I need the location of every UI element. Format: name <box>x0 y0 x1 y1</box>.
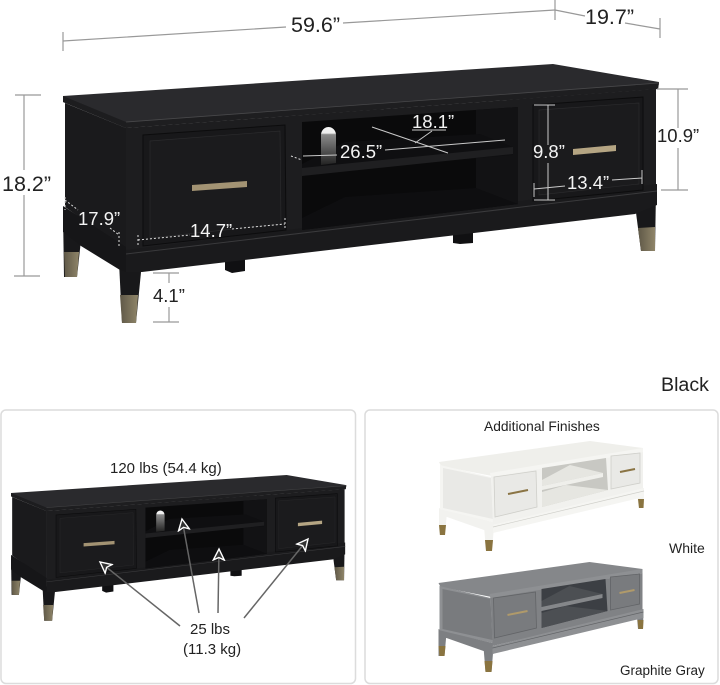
dimension: overall depth 19.7 <box>555 0 660 38</box>
dimension: shelf depth 18.1: 18.1” <box>412 111 454 132</box>
finish label: White: White <box>669 540 705 556</box>
dimension: overall height 18.2: 18.2” <box>2 172 51 196</box>
finish label: Black: Black <box>661 374 709 396</box>
dimension: drawer width 13.4 <box>534 170 642 197</box>
shelf and drawer weight capacity: (11.3 kg) <box>183 641 241 658</box>
graphite gray TV stand <box>438 562 644 672</box>
panel: weight capacity <box>1 410 356 684</box>
dimension: drawer height 9.8 <box>533 105 565 200</box>
dimension: drawer width 14.7 <box>138 218 285 247</box>
main black TV stand <box>63 64 659 323</box>
dimension: shelf width 26.5: 26.5” <box>340 141 382 162</box>
dimension: side depth 17.9 <box>65 197 120 248</box>
dimension: drawer height 9.8: 9.8” <box>533 141 565 162</box>
finish label: Graphite Gray: Graphite Gray <box>620 663 705 678</box>
dimension: overall width 59.6 <box>63 10 555 51</box>
dimension: leg height 4.1 <box>153 273 185 322</box>
dimension: shelf width 26.5 <box>291 140 505 162</box>
dimension: leg height 4.1: 4.1” <box>153 285 185 306</box>
dimension: overall depth 19.7: 19.7” <box>585 5 634 29</box>
dimension: side depth 17.9: 17.9” <box>78 208 120 229</box>
arrows to drawers and shelves <box>100 519 308 626</box>
dimension: drawer opening height 10.9 <box>657 89 699 190</box>
shelf and drawer weight capacity: 25 lbs <box>190 621 230 638</box>
heading: total weight: 120 lbs (54.4 kg) <box>110 460 222 477</box>
dimension: shelf depth 18.1 <box>372 111 454 153</box>
black TV stand with weight arrows <box>11 475 346 621</box>
white TV stand <box>439 441 644 551</box>
panel: additional finishes <box>365 410 718 684</box>
dimension: overall width 59.6: 59.6” <box>291 13 340 37</box>
dimension: drawer opening height 10.9: 10.9” <box>657 125 699 146</box>
dimension: drawer width 14.7: 14.7” <box>190 220 232 241</box>
dimension: overall height 18.2 <box>2 95 51 276</box>
heading: additional finishes: Additional Finishes <box>484 419 600 434</box>
dimension: drawer width 13.4: 13.4” <box>567 172 609 193</box>
